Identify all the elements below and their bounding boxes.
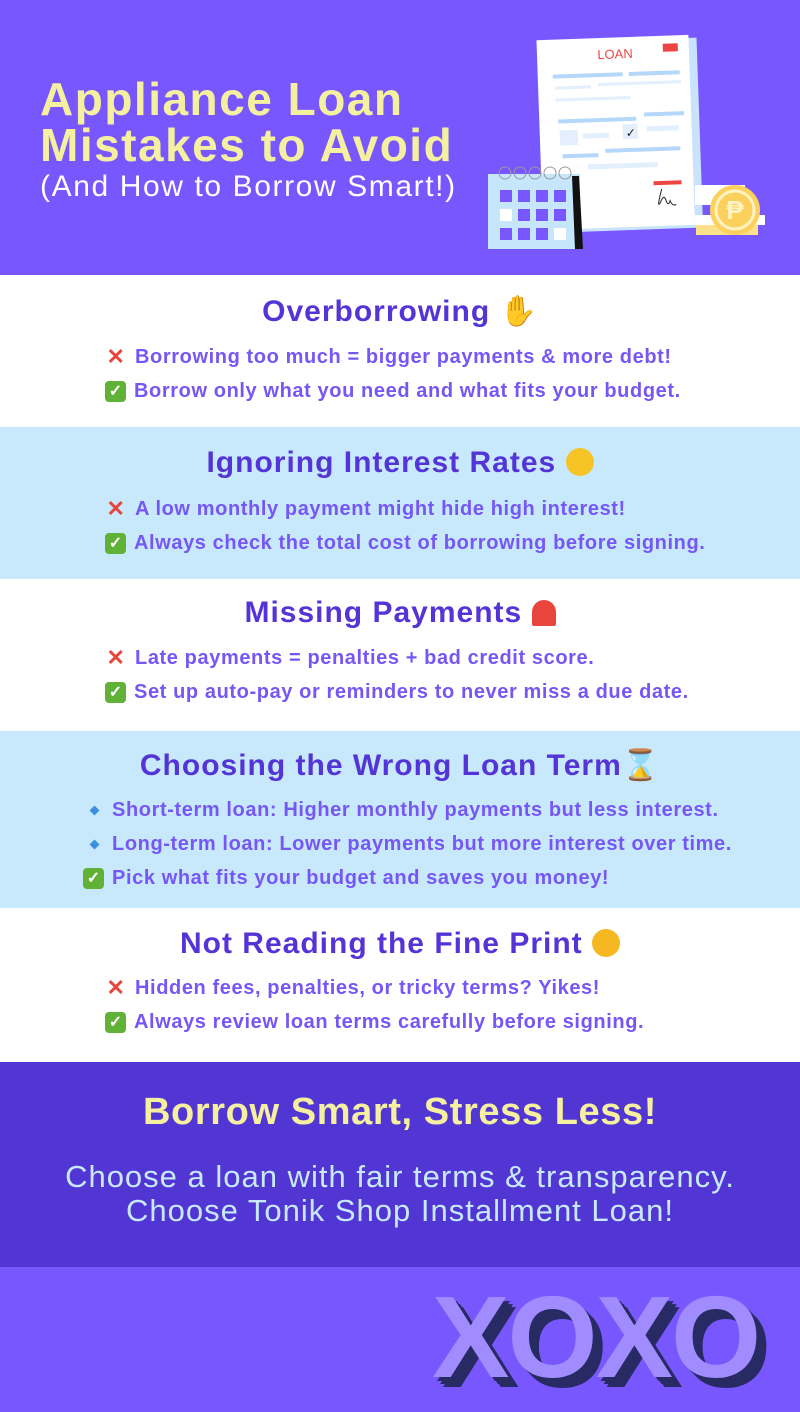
- text block: ✕: [106, 344, 126, 369]
- text block: [105, 645, 689, 703]
- text block: [105, 344, 681, 402]
- text block: ✕: [106, 645, 126, 670]
- panel: missing payments: [0, 579, 800, 731]
- text block: Always check the total cost of borrowing before signing.: [134, 532, 705, 554]
- text block: A low monthly payment might hide high interest!: [135, 498, 626, 520]
- panel: overborrowing: [0, 275, 800, 427]
- text block: Hidden fees, penalties, or tricky terms? Yikes!: [135, 977, 600, 999]
- text block: Set up auto-pay or reminders to never miss a due date.: [134, 681, 689, 703]
- subtitle: (And How to Borrow Smart!): [40, 170, 457, 203]
- heading: Choosing the Wrong Loan Term⌛: [140, 749, 660, 782]
- text block: [105, 975, 644, 1033]
- conclusion text: Choose a loan with fair terms & transparency.: [65, 1159, 735, 1194]
- heading: Not Reading the Fine Print: [180, 927, 583, 960]
- conclusion heading: Borrow Smart, Stress Less!: [143, 1091, 657, 1133]
- footer: XOXO: XOXO: [442, 1282, 769, 1412]
- footer: XOXO: XOXO: [432, 1272, 759, 1402]
- heading: Ignoring Interest Rates: [206, 446, 556, 479]
- conclusion text: [65, 1159, 735, 1228]
- text block: ✓: [109, 382, 122, 400]
- text block: Late payments = penalties + bad credit score.: [135, 647, 594, 669]
- header panel: [0, 0, 800, 275]
- panel: interest rates: [0, 427, 800, 579]
- illustration: loan document, calendar, coin: LOAN: [597, 46, 633, 62]
- text block: ✕: [106, 975, 126, 1000]
- text block: Always review loan terms carefully before signing.: [134, 1011, 644, 1033]
- text block: ✕: [106, 496, 126, 521]
- heading: Missing Payments: [244, 596, 522, 629]
- text block: ✓: [109, 1014, 122, 1030]
- panel: loan term: [0, 731, 800, 908]
- conclusion text: Choose Tonik Shop Installment Loan!: [126, 1193, 674, 1228]
- text block: ✓: [87, 870, 100, 886]
- title: Appliance Loan: [40, 73, 403, 125]
- text block: [83, 799, 732, 889]
- panel: conclusion: [0, 1062, 800, 1267]
- text block: ✓: [109, 534, 122, 552]
- text block: Pick what fits your budget and saves you money!: [112, 867, 609, 889]
- text block: ✓: [109, 684, 122, 700]
- text block: [105, 496, 705, 554]
- text block: Borrowing too much = bigger payments & more debt!: [135, 346, 672, 368]
- illustration: loan document, calendar, coin: ₱: [726, 195, 744, 225]
- title: [40, 73, 453, 171]
- text block: Borrow only what you need and what fits your budget.: [134, 380, 681, 402]
- footer: XOXO: XOXO: [439, 1279, 766, 1409]
- panel: fine print: [0, 908, 800, 1062]
- illustration: loan document, calendar, coin: ✓: [626, 126, 636, 140]
- text block: Short-term loan: Higher monthly payments but less interest.: [112, 799, 719, 821]
- footer: XOXO: XOXO: [436, 1276, 763, 1406]
- text block: Long-term loan: Lower payments but more interest over time.: [112, 833, 732, 855]
- title: Mistakes to Avoid: [40, 119, 453, 171]
- heading: Overborrowing ✋: [262, 295, 538, 328]
- illustration: loan document, calendar, coin: [488, 34, 765, 249]
